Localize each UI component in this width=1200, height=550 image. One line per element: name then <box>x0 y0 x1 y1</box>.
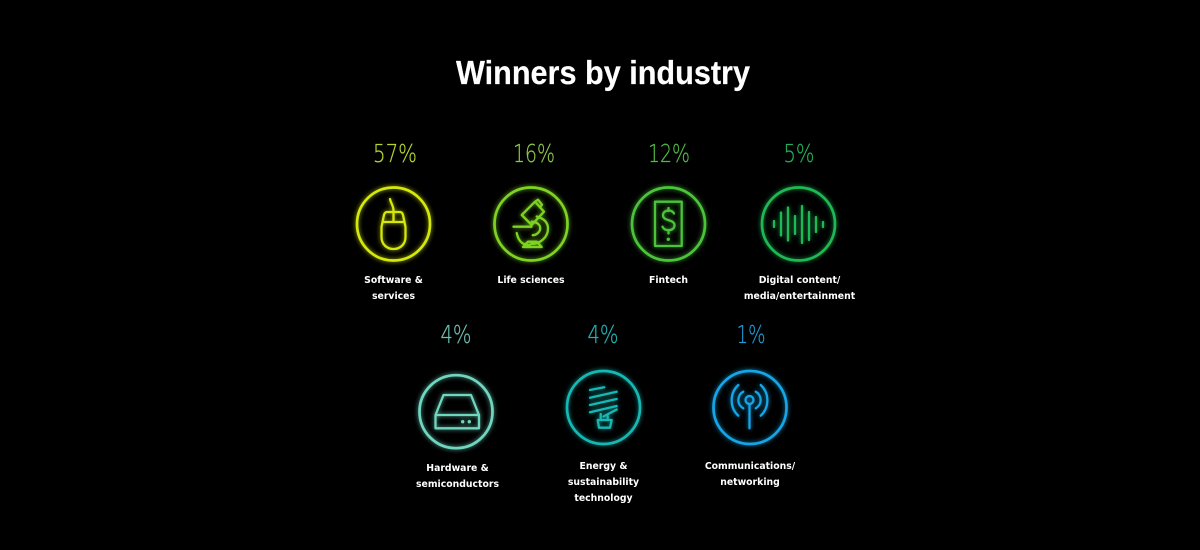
label: Software & <box>364 275 423 286</box>
percentage: 16%: 16% <box>513 139 555 168</box>
item: life sciences <box>494 139 568 286</box>
icon: hard drive <box>420 375 492 448</box>
percentage: 5%: 5% <box>784 139 814 168</box>
label: Communications/ <box>705 461 796 472</box>
item: software and services <box>357 139 430 302</box>
percentage: 12%: 12% <box>648 139 690 168</box>
percentage: 4%: 4% <box>588 320 618 349</box>
item: energy <box>567 320 640 504</box>
label: networking <box>720 477 780 488</box>
icon: sound wave <box>762 188 835 260</box>
label: Fintech <box>649 275 688 286</box>
label: sustainability <box>568 477 639 488</box>
item: digital content <box>744 139 856 302</box>
percentage: 4%: 4% <box>440 320 472 349</box>
item: fintech <box>632 139 705 286</box>
icon: energy-saving bulb <box>567 371 640 444</box>
label: services <box>372 291 415 302</box>
label: technology <box>574 493 633 504</box>
label: media/entertainment <box>744 291 856 302</box>
title: Winners by industry <box>456 54 751 91</box>
label: semiconductors <box>416 479 499 490</box>
label: Life sciences <box>497 275 565 286</box>
percentage: 57%: 57% <box>373 139 417 168</box>
icon: phone with dollar sign <box>632 188 705 260</box>
icon: computer mouse <box>357 188 430 260</box>
item: hardware <box>416 320 499 490</box>
icon: antenna <box>714 371 786 444</box>
label: Digital content/ <box>759 275 841 286</box>
label: Energy & <box>580 461 627 472</box>
item: communications <box>705 320 796 488</box>
label: Hardware & <box>426 463 489 474</box>
icon: microscope <box>494 188 568 260</box>
percentage: 1%: 1% <box>736 320 766 349</box>
